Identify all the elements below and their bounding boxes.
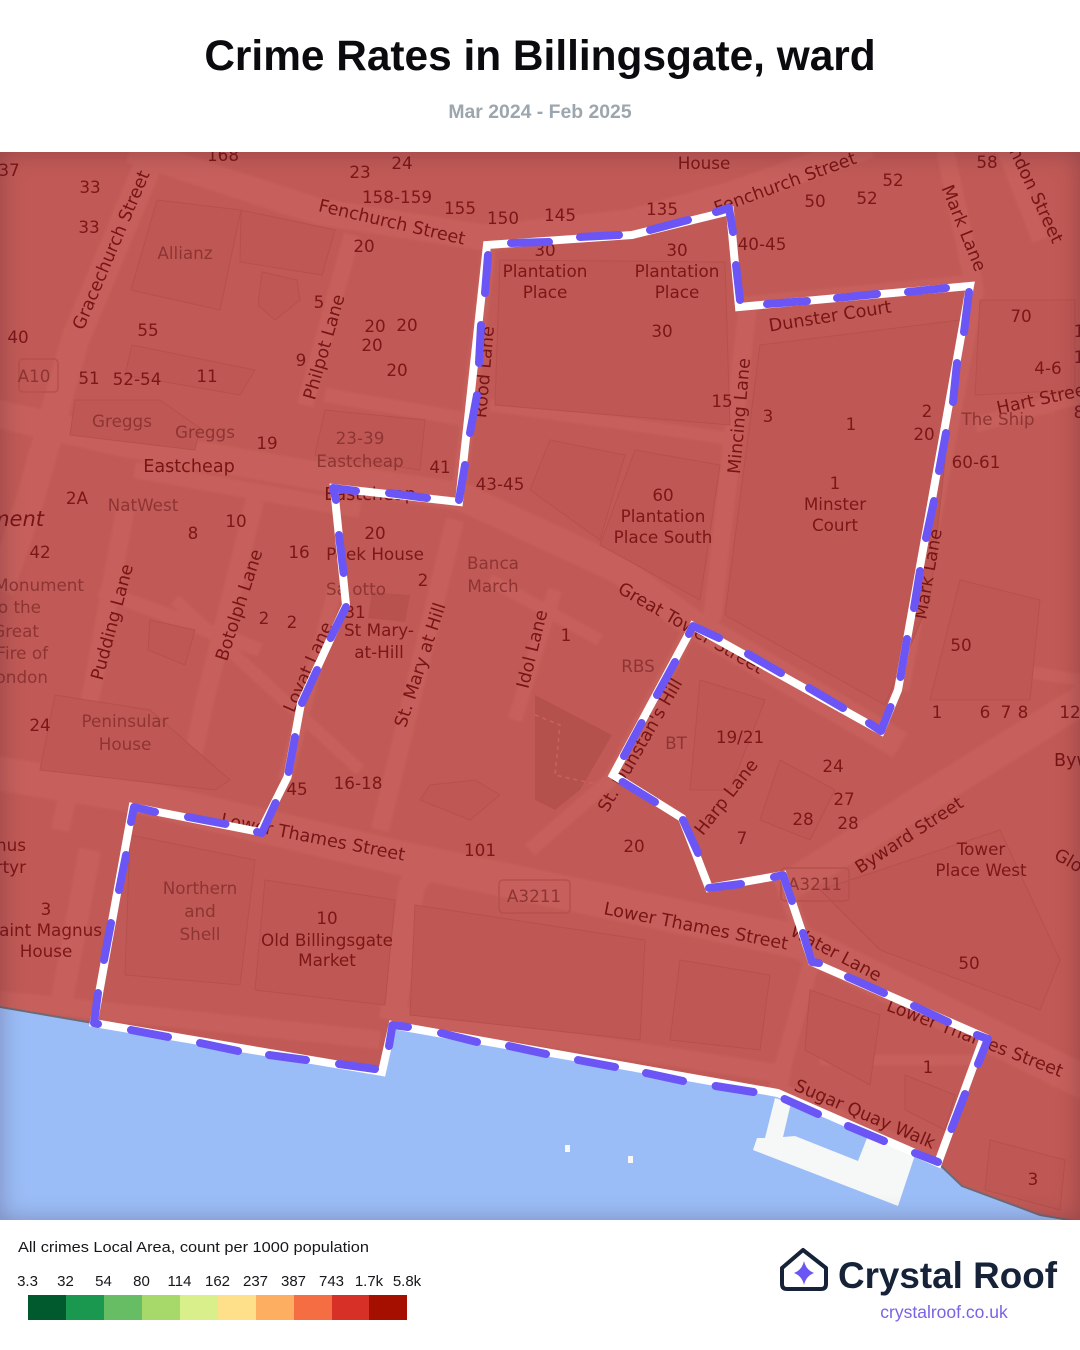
house number labels: 1	[846, 414, 856, 434]
ward boundary: purple dashes	[94, 208, 988, 1162]
street name labels: St. Mary at Hill	[391, 601, 450, 730]
street name labels: St. Dunstan's Hill	[595, 675, 687, 816]
house number labels: 50	[958, 953, 980, 973]
house number labels: House	[678, 153, 730, 173]
map panel	[0, 152, 1080, 1220]
river thames	[0, 1007, 1075, 1221]
legend scale values: 1.7k	[355, 1273, 384, 1290]
street name labels: Lower Thames Street	[219, 810, 407, 866]
building and place labels: Northern	[163, 878, 237, 898]
house number labels: Place South	[614, 527, 712, 547]
road shield labels: A3211	[507, 886, 561, 906]
street name labels: Great Tower Street	[614, 579, 767, 679]
street name labels: Dunster Court	[767, 297, 893, 337]
house number labels: 3	[41, 899, 51, 919]
legend scale values: 162	[205, 1273, 230, 1290]
house number labels: 101	[464, 840, 496, 860]
house number labels: 52	[856, 188, 878, 208]
house number labels: 3	[763, 406, 773, 426]
house number labels: Market	[298, 950, 356, 970]
building and place labels	[0, 243, 1035, 944]
street name labels: Lower Thames Street	[602, 899, 790, 955]
building and place labels: 23-39	[336, 428, 384, 448]
house number labels: House	[20, 941, 72, 961]
house number labels: 2	[259, 608, 269, 628]
legend	[17, 1239, 422, 1320]
icon: house with star	[782, 1250, 826, 1289]
house number labels: St Mary-	[344, 620, 414, 640]
street name labels: Gracechurch Street	[69, 168, 155, 333]
house number labels: 20	[353, 236, 375, 256]
house number labels: 20	[364, 523, 386, 543]
building and place labels: Peninsular	[81, 711, 169, 731]
house number labels: Place	[655, 282, 699, 302]
building and place labels: March	[467, 576, 519, 596]
house number labels: 33	[79, 177, 101, 197]
house number labels: 16	[288, 542, 310, 562]
house number labels: 2	[418, 570, 428, 590]
house number labels: 43-45	[476, 474, 524, 494]
building and place labels: Greggs	[175, 422, 235, 442]
house number labels: 58	[976, 152, 998, 172]
road shield labels: A3211	[788, 874, 842, 894]
house number labels: Place	[523, 282, 567, 302]
building footprints	[40, 200, 1075, 1210]
street name labels: Idol Lane	[514, 608, 552, 691]
house number labels	[0, 145, 1080, 1189]
house number labels: 19/21	[716, 727, 764, 747]
street name labels: Lovat Lane	[280, 619, 338, 716]
map edge vignette	[0, 152, 1080, 1220]
street name labels: Sugar Quay Walk	[791, 1076, 939, 1154]
street name labels: Rood Lane	[471, 325, 499, 419]
road shield labels: A10	[18, 366, 50, 386]
darker plaza with dotted path	[368, 592, 612, 810]
legend scale values: 3.3	[17, 1273, 38, 1290]
house number labels: 6	[980, 702, 990, 722]
house number labels: 24	[822, 756, 844, 776]
house number labels: 20	[386, 360, 408, 380]
legend title: All crimes Local Area, count per 1000 population	[18, 1239, 369, 1256]
legend scale values: 32	[57, 1273, 74, 1290]
house number labels: at-Hill	[354, 642, 404, 662]
house number labels: 2	[287, 612, 297, 632]
building and place labels: RBS	[621, 656, 655, 676]
house number labels: 52	[882, 170, 904, 190]
road shields	[19, 359, 849, 913]
street name labels: Byward Street	[852, 793, 967, 878]
legend colour bar	[28, 1295, 407, 1320]
house number labels: 1	[830, 473, 840, 493]
house number labels: 60-61	[952, 452, 1000, 472]
house number labels: 2	[922, 401, 932, 421]
house number labels: 23	[349, 162, 371, 182]
building and place labels: Allianz	[157, 243, 213, 263]
house number labels: 28	[792, 809, 814, 829]
house number labels: 52-54	[113, 369, 161, 389]
house number labels: Place West	[935, 860, 1027, 880]
building and place labels: The Ship	[960, 409, 1035, 429]
house number labels: 42	[29, 542, 51, 562]
wordmark: Crystal Roof	[838, 1255, 1058, 1296]
building and place labels: Greggs	[92, 411, 152, 431]
house number labels: Plantation	[621, 506, 705, 526]
house number labels: 50	[804, 191, 826, 211]
house number labels: 1	[932, 702, 942, 722]
house number labels: 60	[652, 485, 674, 505]
legend scale values: 54	[95, 1273, 112, 1290]
house number labels: 30	[534, 240, 556, 260]
title: Crime Rates in Billingsgate, ward	[204, 32, 876, 79]
house number labels: 45	[286, 779, 308, 799]
building and place labels: BT	[665, 733, 688, 753]
street name labels: Fenchurch Street	[317, 196, 467, 250]
street name labels: Harp Lane	[691, 756, 763, 839]
street name labels: Lower Thames Street	[884, 996, 1066, 1082]
house number labels: 27	[833, 789, 855, 809]
house number labels: 40	[7, 327, 29, 347]
street name labels: Eastcheap	[324, 485, 416, 505]
legend scale values: 114	[168, 1273, 191, 1290]
house number labels: 20	[396, 315, 418, 335]
building and place labels: NatWest	[108, 495, 179, 515]
street name labels: Philpot Lane	[300, 292, 350, 402]
house number labels: 16-18	[334, 773, 382, 793]
pier	[565, 1098, 915, 1206]
street name labels: Mark Lane	[937, 182, 989, 275]
street name labels: Water Lane	[787, 922, 884, 986]
road shield labels	[18, 366, 842, 906]
logo: Crystal Roof	[780, 1248, 1058, 1322]
street name labels: Mark Lane	[911, 527, 947, 621]
house number labels: Old Billingsgate	[261, 930, 393, 950]
house number labels: Plantation	[635, 261, 719, 281]
building and place labels: Banca	[467, 553, 519, 573]
house number labels: 5	[314, 292, 324, 312]
street name labels: Eastcheap	[143, 457, 235, 477]
house number labels: 4-6	[1034, 358, 1062, 378]
house number labels: 155	[444, 198, 476, 218]
house number labels: 2A	[66, 488, 89, 508]
street name labels: Botolph Lane	[213, 547, 267, 663]
house number labels: 24	[391, 153, 413, 173]
house number labels: 24	[29, 715, 51, 735]
legend scale values: 5.8k	[393, 1273, 422, 1290]
house number labels: 28	[837, 813, 859, 833]
house number labels: 33	[78, 217, 100, 237]
house number labels: 135	[646, 199, 678, 219]
house number labels: Tower	[956, 839, 1005, 859]
street name labels	[0, 126, 1080, 1154]
house number labels: 19	[256, 433, 278, 453]
house number labels: 9	[296, 350, 306, 370]
house number labels: 50	[950, 635, 972, 655]
house number labels: 40-45	[738, 234, 786, 254]
house number labels: 20	[913, 424, 935, 444]
house number labels: 30	[666, 240, 688, 260]
house number labels: 20	[364, 316, 386, 336]
house number labels: 20	[361, 335, 383, 355]
subtitle: date range: Mar 2024 - Feb 2025	[448, 101, 632, 123]
building and place labels: Eastcheap	[316, 451, 404, 471]
house number labels: Plantation	[503, 261, 587, 281]
building and place labels: Sa otto	[326, 579, 386, 599]
house number labels: 1	[561, 625, 571, 645]
house number labels: 8	[1018, 702, 1028, 722]
house number labels: 7	[1001, 702, 1011, 722]
house number labels: 20	[623, 836, 645, 856]
house number labels: 51	[78, 368, 100, 388]
building and place labels: Shell	[180, 924, 220, 944]
building and place labels: House	[99, 734, 151, 754]
house number labels: 3	[1028, 1169, 1038, 1189]
house number labels: 8	[188, 523, 198, 543]
house number labels: 15	[711, 391, 733, 411]
legend scale values	[17, 1273, 422, 1290]
house number labels: 7	[737, 828, 747, 848]
legend scale values: 80	[133, 1273, 150, 1290]
street name labels: Pudding Lane	[88, 562, 138, 682]
house number labels: 70	[1010, 306, 1032, 326]
street name labels: Mincing Lane	[725, 357, 755, 475]
building and place labels: and	[184, 901, 216, 921]
house number labels: 30	[651, 321, 673, 341]
house number labels: 145	[544, 205, 576, 225]
road network	[0, 145, 1080, 1160]
house number labels: Minster	[804, 494, 866, 514]
house number labels: 41	[429, 457, 451, 477]
house number labels: 1	[923, 1057, 933, 1077]
legend scale values: 743	[319, 1273, 344, 1290]
legend scale values: 237	[243, 1273, 268, 1290]
house number labels: 10	[225, 511, 247, 531]
ward boundary: white base line	[94, 211, 984, 1163]
website: crystalroof.co.uk	[880, 1302, 1008, 1322]
house number labels: 31	[344, 602, 366, 622]
house number labels: Peek House	[326, 544, 424, 564]
house number labels: 158-159	[362, 187, 432, 207]
house number labels: Court	[812, 515, 858, 535]
house number labels: 10	[316, 908, 338, 928]
legend scale values: 387	[281, 1273, 306, 1290]
house number labels: 150	[487, 208, 519, 228]
house number labels: 11	[196, 366, 218, 386]
house number labels: 55	[137, 320, 159, 340]
